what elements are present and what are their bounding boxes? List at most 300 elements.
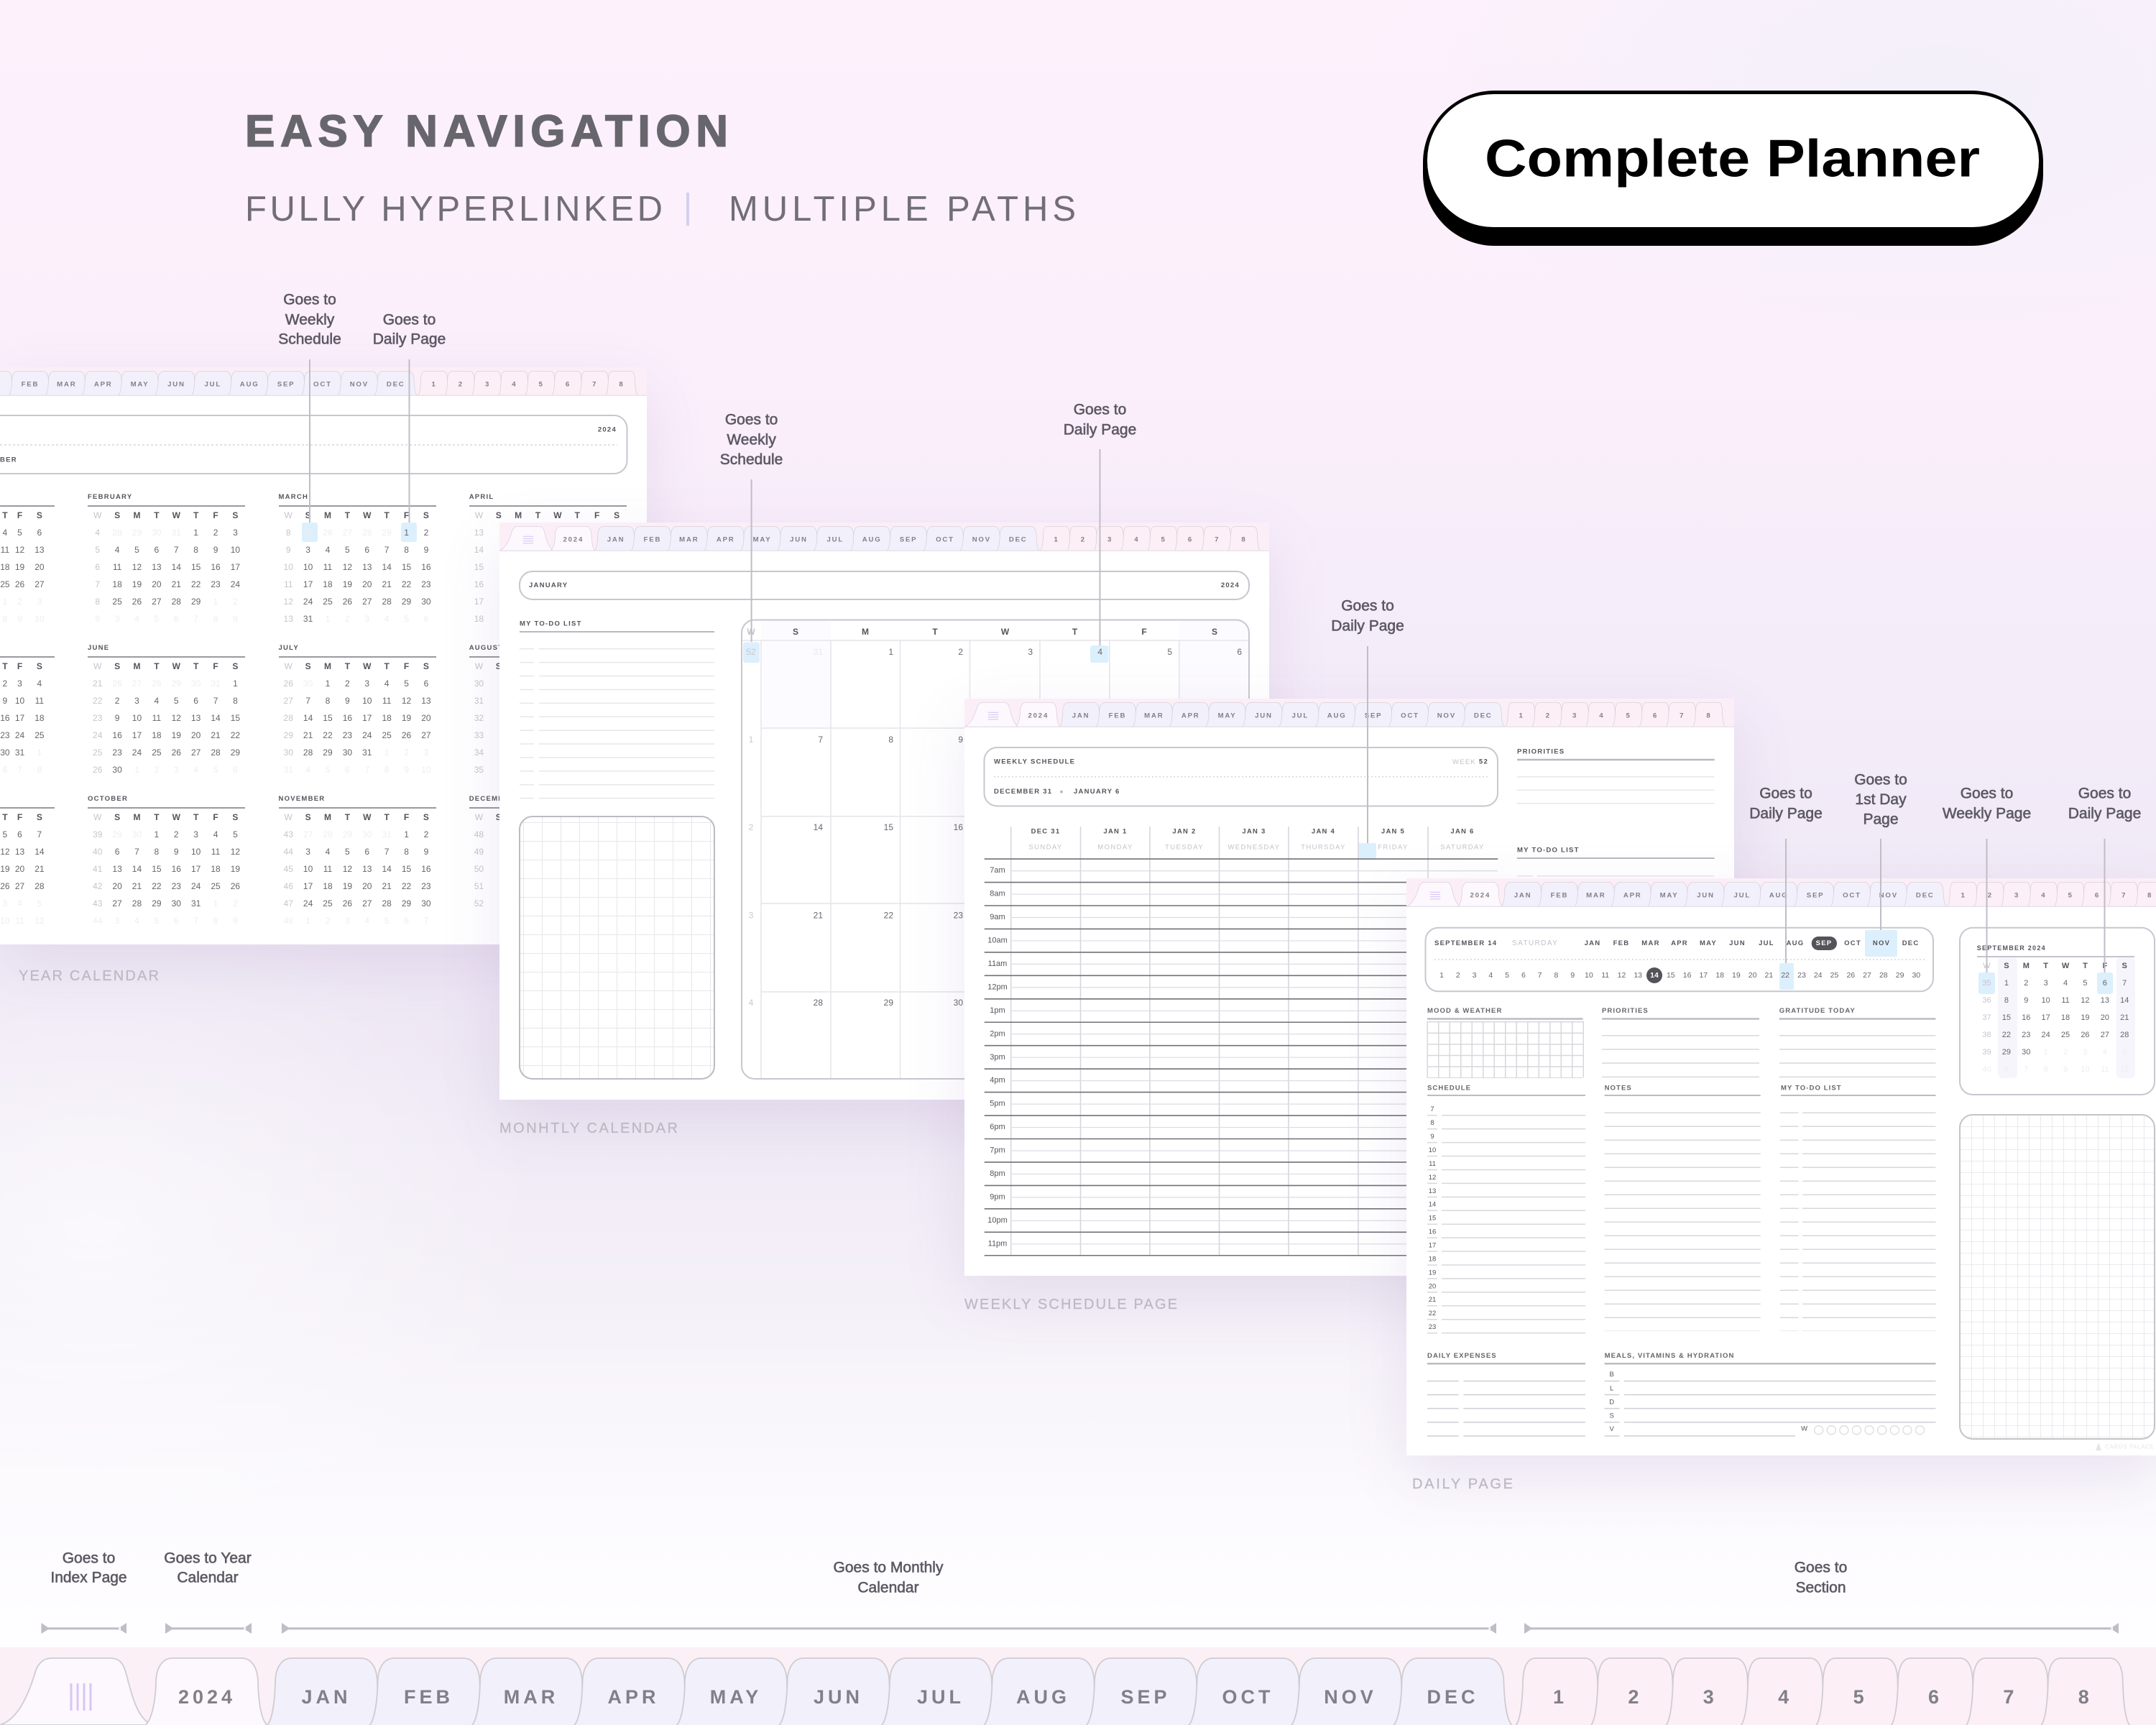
calendar: December: W (553, 812, 562, 822)
calendar: March: 7 (384, 545, 389, 555)
calendar: November: 31 (382, 829, 392, 840)
calendar: February: M (133, 510, 140, 520)
calendar: October: 9 (233, 916, 238, 926)
calendar: January: 20 (34, 562, 45, 572)
year page tab bar: 4 (512, 380, 517, 388)
monthly calendar grid: 52 (746, 647, 756, 657)
calendar: November: 2 (326, 916, 330, 926)
monthly page tab bar: 1 (1054, 535, 1059, 543)
daily header box: SEP (1816, 939, 1832, 947)
calendar: April: 14 (474, 545, 484, 555)
calendar: August: 33 (474, 730, 484, 740)
calendar: March: S (423, 510, 429, 520)
calendar: July: W (363, 661, 371, 671)
calendar: October: 5 (233, 829, 238, 840)
calendar: July: 27 (284, 696, 293, 706)
calendar: November: 30 (362, 829, 372, 840)
mini calendar: September 2024: S (2004, 962, 2009, 970)
calendar: February: 9 (95, 614, 100, 624)
mini calendar: September 2024: 36 (1982, 996, 1991, 1005)
calendar: September: 13 (15, 847, 24, 857)
calendar: July: 29 (323, 748, 333, 758)
daily page tab bar: 7 (2122, 891, 2127, 899)
daily page tab bar: FEB (1551, 891, 1568, 899)
calendar: May: 8 (37, 765, 42, 775)
daily header box: 5 (1505, 971, 1509, 980)
calendar: March: 24 (303, 597, 313, 607)
calendar: February: S (232, 510, 238, 520)
calendar: February: 6 (155, 545, 159, 555)
calendar: July: 25 (382, 730, 392, 740)
weekly page tab bar: MAY (1218, 712, 1236, 719)
calendar: March: 28 (362, 528, 372, 538)
panel: year calendar page: APRIL (469, 493, 494, 501)
meals, vitamins and hydration: S (1610, 1412, 1614, 1420)
calendar: March: 29 (402, 597, 411, 607)
calendar: June: 21 (93, 678, 102, 689)
weekly page tab bar: OCT (1401, 712, 1419, 719)
calendar: July: 16 (343, 713, 352, 723)
calendar: March: 22 (402, 579, 411, 589)
daily header box: 17 (1699, 971, 1708, 980)
calendar: March: W (363, 510, 371, 520)
year page tab bar: MAY (131, 380, 149, 388)
calendar: February: 27 (152, 597, 162, 607)
calendar: May: T (2, 661, 8, 671)
calendar: June: 5 (174, 696, 179, 706)
notes: NOTES (1605, 1084, 1632, 1092)
mini calendar: September 2024: 38 (1982, 1031, 1991, 1039)
calendar: February: 21 (172, 579, 181, 589)
calendar: September: 12 (0, 847, 10, 857)
bottom navigation tab bar: 6 (1928, 1686, 1943, 1708)
mini calendar: September 2024: W (1983, 962, 1991, 970)
calendar: September: T (2, 812, 8, 822)
mini calendar: September 2024: 30 (2022, 1048, 2030, 1057)
mini calendar: September 2024 (1977, 956, 2134, 1078)
mini calendar: September 2024: 22 (2002, 1031, 2011, 1039)
calendar: September: 26 (0, 881, 10, 891)
calendar: December (469, 807, 627, 912)
calendar: November: 14 (382, 864, 392, 874)
panel: weekly schedule page (964, 699, 1734, 1276)
mini calendar: September 2024: 20 (2101, 1013, 2109, 1022)
calendar: October: 3 (115, 916, 119, 926)
calendar: June: 1 (233, 678, 238, 689)
callout: weekly daily page (1331, 598, 1404, 843)
callout: weekly daily page: Goes to (1341, 598, 1394, 614)
weekly time grid: 9pm (990, 1192, 1005, 1201)
brand mark: CARDS PALACE (2105, 1443, 2154, 1450)
calendar: December: 52 (474, 898, 484, 908)
calendar: October: 27 (112, 898, 122, 908)
monthly calendar grid: 16 (954, 822, 963, 832)
calendar: June: 24 (132, 748, 142, 758)
calendar: October: 31 (191, 898, 201, 908)
calendar: November: 29 (343, 829, 352, 840)
weekly page tab bar: 8 (1706, 712, 1712, 719)
weekly time grid: SATURDAY (1440, 844, 1485, 851)
calendar: June: 30 (191, 678, 201, 689)
mini calendar: September 2024: 3 (2044, 979, 2048, 988)
calendar: July: 21 (303, 730, 313, 740)
schedule: 13 (1429, 1187, 1436, 1195)
calendar: November: 25 (323, 898, 333, 908)
calendar: July: F (404, 661, 409, 671)
calendar: August: T (535, 661, 540, 671)
mini calendar: September 2024: 1 (2044, 1048, 2048, 1057)
calendar: November: 4 (326, 847, 330, 857)
weekly page tab bar (964, 699, 1734, 727)
calendar: October: 7 (193, 916, 198, 926)
daily header box: 9 (1570, 971, 1575, 980)
calendar: March: 1 (404, 528, 409, 538)
schedule: 10 (1429, 1146, 1436, 1154)
weekly page tab bar: SEP (1365, 712, 1382, 719)
calendar: October: 22 (152, 881, 162, 891)
calendar: February: W (93, 510, 101, 520)
bottom navigation tab bar (0, 1647, 2156, 1725)
mini calendar: September 2024: T (2083, 962, 2088, 970)
calendar: May: 2 (3, 678, 7, 689)
calendar: February: 5 (95, 545, 100, 555)
monthly calendar grid: S (793, 627, 798, 637)
calendar: July: 24 (362, 730, 372, 740)
mini calendar: September 2024: F (2102, 962, 2107, 970)
calendar: July: 30 (303, 678, 313, 689)
meals, vitamins and hydration: L (1610, 1384, 1613, 1393)
calendar: June: W (93, 661, 101, 671)
calendar: March: 6 (424, 614, 428, 624)
monthly calendar grid: T (932, 627, 938, 637)
weekly time grid: JAN 4 (1312, 828, 1335, 835)
calendar: November: 48 (284, 916, 293, 926)
calendar: February: F (213, 510, 218, 520)
year page header box (0, 415, 627, 474)
calendar: March: 4 (326, 545, 330, 555)
calendar: August (469, 656, 627, 778)
calendar: June: 27 (191, 748, 201, 758)
caption: year calendar: YEAR CALENDAR (19, 968, 159, 984)
mood and weather grid: MOOD & WEATHER (1427, 1007, 1502, 1015)
calendar: February: 7 (174, 545, 179, 555)
calendar: January: 13 (34, 545, 45, 555)
daily header box: 26 (1846, 971, 1855, 980)
monthly calendar grid: 1 (888, 647, 893, 657)
monthly page tab bar: 7 (1215, 535, 1220, 543)
monthly calendar grid: 9 (958, 735, 963, 745)
calendar: October: 17 (191, 864, 201, 874)
calendar: July: S (423, 661, 429, 671)
mini calendar: September 2024: 7 (2024, 1065, 2028, 1074)
calendar: March: 5 (404, 614, 409, 624)
monthly page tab bar: JAN (607, 535, 625, 543)
calendar: June: 29 (172, 678, 181, 689)
calendar: November: 13 (362, 864, 372, 874)
calendar: June: M (133, 661, 140, 671)
calendar: March: 30 (421, 597, 431, 607)
calendar: July: 29 (284, 730, 293, 740)
calendar: January: 4 (3, 528, 7, 538)
year page tab bar: FEB (22, 380, 39, 388)
weekly time grid: 7pm (990, 1146, 1005, 1154)
calendar: June: 30 (112, 765, 122, 775)
calendar: November: 22 (402, 881, 411, 891)
calendar: February: 9 (213, 545, 218, 555)
calendar: February: 1 (213, 597, 218, 607)
caption: daily page: DAILY PAGE (1412, 1476, 1513, 1492)
weekly page tab bar: 2024 (1028, 712, 1049, 719)
calendar: October: 16 (172, 864, 181, 874)
calendar: November: W (285, 812, 292, 822)
monthly calendar grid: 15 (884, 822, 893, 832)
calendar: July: 26 (402, 730, 411, 740)
calendar: February: 23 (211, 579, 221, 589)
calendar: June: 25 (93, 748, 102, 758)
panel: year calendar page: DECEMBER (469, 795, 515, 803)
calendar: July: 7 (364, 765, 369, 775)
calendar: November: 11 (323, 864, 332, 874)
calendar: September: 6 (17, 829, 22, 840)
callout: goes to year calendar: Calendar (177, 1570, 239, 1586)
year page tab bar: AUG (240, 380, 259, 388)
mini calendar: September 2024: 2 (2024, 979, 2028, 988)
calendar: April: W (475, 510, 483, 520)
daily header box: 18 (1715, 971, 1724, 980)
calendar: October: 13 (112, 864, 122, 874)
calendar: May: 9 (3, 696, 7, 706)
monthly calendar grid: W (1001, 627, 1010, 637)
mini calendar: September 2024: 9 (2024, 996, 2028, 1005)
daily header box: OCT (1844, 939, 1861, 947)
weekly page tab bar: 7 (1680, 712, 1685, 719)
daily header box: FEB (1613, 939, 1629, 947)
meals, vitamins and hydration: MEALS, VITAMINS & HYDRATION (1605, 1352, 1734, 1360)
calendar: December: T (575, 812, 580, 822)
calendar: October: W (172, 812, 180, 822)
schedule: 15 (1429, 1215, 1436, 1223)
meals, vitamins and hydration: V (1610, 1425, 1615, 1433)
calendar: February: 3 (233, 528, 238, 538)
panel: year calendar page: JULY (279, 644, 299, 652)
highlight: NOV and day 22 (1779, 930, 1897, 990)
calendar: November: 5 (384, 916, 389, 926)
year page tab bar: JUN (167, 380, 185, 388)
calendar: January: 1 (3, 597, 7, 607)
monthly calendar grid (742, 620, 1249, 1079)
daily page tab bar: NOV (1879, 891, 1898, 899)
callout: mini calendar daily page: Goes to (2078, 785, 2131, 802)
callout: goes to section (1795, 1560, 1847, 1596)
daily header box: 2 (1456, 971, 1460, 980)
daily header box: JUN (1729, 939, 1746, 947)
daily page tab bar: MAR (1586, 891, 1606, 899)
callout: year weekly schedule: Goes to (283, 292, 336, 308)
mini calendar: September 2024: 25 (2061, 1031, 2070, 1039)
weekly time grid: 4pm (990, 1076, 1005, 1085)
daily header box: 8 (1554, 971, 1558, 980)
panel: year calendar page: AUGUST (469, 644, 503, 652)
schedule: 12 (1429, 1174, 1436, 1182)
calendar: October: F (213, 812, 218, 822)
calendar: April: M (515, 510, 522, 520)
schedule: 19 (1429, 1269, 1436, 1276)
calendar: March: 31 (303, 614, 313, 624)
mini calendar: September 2024: 37 (1982, 1013, 1991, 1022)
calendar: July: 27 (421, 730, 431, 740)
weekly page tab bar: 4 (1599, 712, 1604, 719)
calendar: November: 29 (402, 898, 411, 908)
schedule: 21 (1429, 1296, 1436, 1304)
calendar: July: T (384, 661, 390, 671)
calendar: June: 17 (132, 730, 142, 740)
subtitle: fully hyperlinked and multiple paths (245, 190, 1076, 229)
calendar: February: 4 (115, 545, 119, 555)
calendar: May: 11 (35, 696, 44, 706)
daily header box: 28 (1879, 971, 1888, 980)
callout: first day page: 1st Day (1855, 791, 1907, 808)
calendar: October: M (133, 812, 140, 822)
calendar: March: 11 (323, 562, 332, 572)
calendar: June: 2 (115, 696, 119, 706)
calendar: January: 9 (17, 614, 22, 624)
calendar: June: 28 (152, 678, 162, 689)
calendar: July: 4 (305, 765, 310, 775)
calendar: October: 6 (115, 847, 119, 857)
mini calendar: September 2024: 12 (2081, 996, 2090, 1005)
mini calendar: September 2024: 8 (2044, 1065, 2048, 1074)
monthly page tab bar: APR (717, 535, 735, 543)
weekly time grid: 3pm (990, 1053, 1005, 1062)
calendar: February: 24 (231, 579, 240, 589)
daily header box: APR (1671, 939, 1688, 947)
monthly page tab bar: MAY (753, 535, 771, 543)
brand mark (2096, 1443, 2154, 1450)
daily header box: 13 (1634, 971, 1642, 980)
callout: daily page date: Daily Page (1749, 805, 1823, 822)
calendar: October: T (193, 812, 198, 822)
calendar: November: W (363, 812, 371, 822)
weekly time grid: JAN 5 (1381, 828, 1405, 835)
calendar: July: 5 (326, 765, 330, 775)
calendar: February: 28 (112, 528, 122, 538)
monthly calendar grid: 4 (1097, 647, 1102, 657)
callout: monthly weekly schedule: Goes to (725, 411, 778, 428)
callout: monthly weekly schedule (720, 411, 783, 642)
calendar: March: 12 (284, 597, 293, 607)
calendar: March: 26 (323, 528, 333, 538)
calendar: March: 8 (286, 528, 291, 538)
calendar: May: 16 (0, 713, 10, 723)
calendar: August: W (553, 661, 562, 671)
mini calendar: September 2024: 35 (1982, 979, 1991, 988)
calendar: October: 23 (172, 881, 181, 891)
weekly time grid: 1pm (990, 1006, 1005, 1015)
calendar: October: 4 (213, 829, 218, 840)
calendar: July: 8 (326, 696, 330, 706)
calendar: June: 26 (112, 678, 122, 689)
calendar: May: S (37, 661, 42, 671)
panel: year calendar page (0, 367, 647, 944)
calendar: November: 5 (345, 847, 350, 857)
bottom navigation tab bar: DEC (1427, 1686, 1479, 1708)
calendar: November: S (423, 812, 429, 822)
calendar: July: 15 (323, 713, 333, 723)
daily page tab bar: 5 (2068, 891, 2073, 899)
calendar: January: S (37, 510, 42, 520)
calendar: January: 26 (15, 579, 24, 589)
daily page tab bar: JUN (1697, 891, 1715, 899)
calendar: February: 5 (155, 614, 159, 624)
mini calendar: September 2024: 10 (2042, 996, 2050, 1005)
mini calendar: September 2024: 8 (2004, 996, 2009, 1005)
calendar: March: 3 (364, 614, 369, 624)
calendar: November: 1 (404, 829, 409, 840)
mini calendar: September 2024: 12 (2120, 1065, 2129, 1074)
calendar: March: 27 (343, 528, 352, 538)
calendar: July: 19 (402, 713, 411, 723)
calendar: February: 4 (134, 614, 139, 624)
meals, vitamins and hydration: W (1801, 1425, 1807, 1433)
callout: daily page date: Goes to (1759, 785, 1812, 802)
daily header box: SATURDAY (1512, 939, 1558, 947)
calendar: July (279, 656, 436, 778)
calendar: October: 19 (231, 864, 240, 874)
gratitude today: GRATITUDE TODAY (1779, 1007, 1856, 1015)
calendar: March: 13 (284, 614, 293, 624)
calendar: July: 7 (305, 696, 310, 706)
bottom navigation tab bar: AUG (1016, 1686, 1070, 1708)
calendar: October: 11 (211, 847, 220, 857)
daily header box: NOV (1873, 939, 1890, 947)
calendar: July: 6 (345, 765, 350, 775)
calendar: May: F (17, 661, 22, 671)
daily header box: MAY (1700, 939, 1717, 947)
calendar: July: 3 (364, 678, 369, 689)
bottom navigation tab bar: JUL (917, 1686, 964, 1708)
calendar: June: 1 (134, 765, 139, 775)
monthly calendar grid: M (862, 627, 869, 637)
mini calendar: September 2024: 11 (2061, 996, 2070, 1005)
calendar: February: 29 (191, 597, 201, 607)
calendar: November: 28 (382, 898, 392, 908)
callout: monthly weekly schedule: Schedule (720, 451, 783, 468)
calendar: February: 1 (193, 528, 198, 538)
monthly calendar grid: 7 (818, 735, 823, 745)
calendar: September: 7 (37, 829, 42, 840)
weekly page tab bar: NOV (1437, 712, 1456, 719)
calendar: July: 1 (384, 748, 389, 758)
calendar: July: 30 (343, 748, 352, 758)
callout: goes to monthly calendar: Calendar (857, 1580, 919, 1596)
calendar: June: 26 (93, 765, 102, 775)
calendar: December: M (515, 812, 522, 822)
calendar: May: 7 (17, 765, 22, 775)
calendar: October: 44 (93, 916, 102, 926)
calendar: March: 10 (303, 562, 313, 572)
calendar: February: 11 (113, 562, 121, 572)
calendar: March: 11 (284, 579, 292, 589)
title: easy navigation: EASY NAVIGATION (245, 106, 728, 157)
calendar: July: 18 (382, 713, 392, 723)
daily header box: 14 (1650, 971, 1659, 980)
calendar: October: 29 (112, 829, 122, 840)
meals, vitamins and hydration: D (1609, 1399, 1614, 1406)
daily header box: 25 (1830, 971, 1838, 980)
calendar: June: 22 (93, 696, 102, 706)
daily header box: MAR (1641, 939, 1660, 947)
calendar: July: 10 (362, 696, 372, 706)
